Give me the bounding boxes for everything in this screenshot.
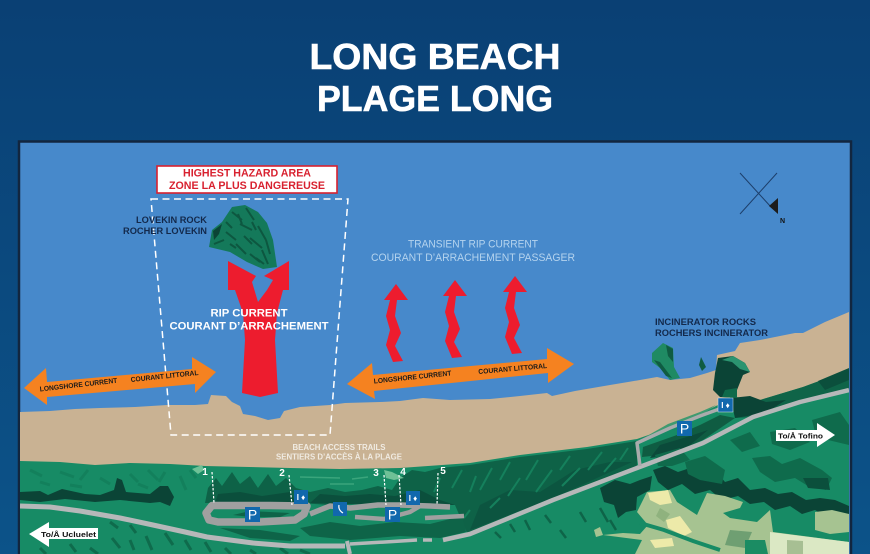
title: PLAGE LONG — [317, 78, 553, 119]
main road west — [20, 506, 345, 546]
transient rip current label: COURANT D’ARRACHEMENT PASSAGER — [371, 252, 575, 264]
icon: telephone — [333, 502, 347, 516]
rip current arrow — [228, 261, 289, 397]
transient rip current arrow 3 — [503, 276, 527, 354]
forest — [20, 368, 849, 554]
west longshore current arrow: LONGSHORE CURRENT — [39, 378, 118, 393]
title — [310, 36, 560, 119]
transient rip current arrow 2 — [443, 280, 467, 358]
Incinerator Rocks label — [655, 317, 768, 339]
arrow: to Ucluelet: To/Å Ucluelet — [41, 530, 97, 539]
forest texture strokes, west fringe — [30, 470, 196, 490]
south of road, middle dark mass — [220, 518, 466, 541]
title: LONG BEACH — [310, 36, 560, 77]
hazard label: ZONE LA PLUS DANGEREUSE — [169, 180, 325, 192]
beach access trails label: BEACH ACCESS TRAILS — [292, 443, 386, 452]
forest texture strokes, light on dark east — [434, 448, 628, 518]
access wedge — [642, 415, 735, 457]
icon: restroom west: I ♦ — [297, 493, 305, 502]
main road east — [443, 390, 849, 540]
arrow: to Ucluelet — [29, 522, 98, 547]
hazard label: HIGHEST HAZARD AREA — [183, 168, 311, 180]
east longshore current arrow: COURANT LITTORAL — [478, 363, 548, 376]
road pieces by junction — [350, 540, 432, 544]
trail markers: 3 — [373, 468, 379, 479]
south-west forest speckle — [40, 522, 310, 554]
transient rip current arrow 1 — [384, 284, 408, 362]
rip current label: COURANT D’ARRACHEMENT — [170, 320, 329, 332]
compass: N — [780, 218, 785, 225]
icon: restroom east — [718, 398, 733, 412]
west parking islands — [233, 511, 290, 517]
trail markers: 4 — [400, 467, 406, 478]
trail markers: 5 — [440, 466, 446, 477]
Incinerator Rocks — [652, 343, 750, 398]
rip current label — [170, 308, 329, 332]
rip current label: RIP CURRENT — [210, 308, 288, 320]
icon: restroom centre: I ♦ — [409, 494, 417, 503]
Lovekin Rock label — [123, 215, 207, 237]
east strip between sand and road — [730, 380, 849, 418]
Lovekin Rock label: LOVEKIN ROCK — [136, 215, 207, 226]
road network — [20, 390, 849, 554]
forest north of road, middle to east — [205, 441, 637, 533]
beach access road — [637, 408, 722, 466]
trail markers: 1 — [202, 467, 208, 478]
parking loop east — [310, 505, 450, 514]
compass — [740, 173, 785, 225]
arrow: to Tofino: To/Å Tofino — [778, 432, 823, 440]
transient rip current label — [371, 238, 575, 264]
Incinerator Rocks label: INCINERATOR ROCKS — [655, 317, 756, 328]
Incinerator Rocks label: ROCHERS INCINERATOR — [655, 328, 768, 339]
icon: parking east: P — [680, 420, 689, 436]
west longshore current arrow: COURANT LITTORAL — [130, 370, 200, 384]
highest hazard zone boundary — [151, 199, 348, 435]
beach access trails label: SENTIERS D’ACCÈS À LA PLAGE — [276, 452, 403, 462]
east longshore current arrow — [347, 348, 574, 399]
icon: parking centre: P — [388, 506, 397, 522]
east longshore current arrow: LONGSHORE CURRENT — [373, 370, 452, 385]
hazard label — [157, 166, 337, 193]
parking loop west — [206, 506, 307, 522]
map frame — [19, 142, 851, 554]
farmland clearings — [594, 490, 849, 554]
trail markers — [192, 465, 446, 505]
trail markers: 2 — [279, 468, 285, 479]
icon: parking west: P — [248, 506, 257, 522]
map panel — [20, 312, 849, 554]
forest base — [20, 370, 849, 554]
south-of-road darkest band east — [653, 466, 849, 518]
beach access trails label — [276, 443, 403, 462]
Lovekin Rock — [209, 205, 277, 269]
icon: parking centre — [385, 506, 400, 522]
access fringe — [640, 405, 716, 440]
arrow: to Tofino — [776, 423, 835, 447]
icon: parking east — [677, 420, 692, 436]
beach sand — [20, 312, 849, 480]
darkest band west — [20, 478, 174, 506]
icon: parking west — [245, 506, 260, 522]
icon: restroom centre — [406, 491, 420, 505]
west longshore current arrow — [24, 357, 216, 405]
icon: restroom east: I ♦ — [721, 401, 730, 410]
transient rip current label: TRANSIENT RIP CURRENT — [408, 238, 538, 250]
icon: restroom west — [294, 490, 308, 504]
forest mid strip west of trail 3 — [300, 477, 368, 484]
Lovekin Rock label: ROCHER LOVEKIN — [123, 226, 207, 237]
blotches, east forest upper — [655, 412, 849, 490]
